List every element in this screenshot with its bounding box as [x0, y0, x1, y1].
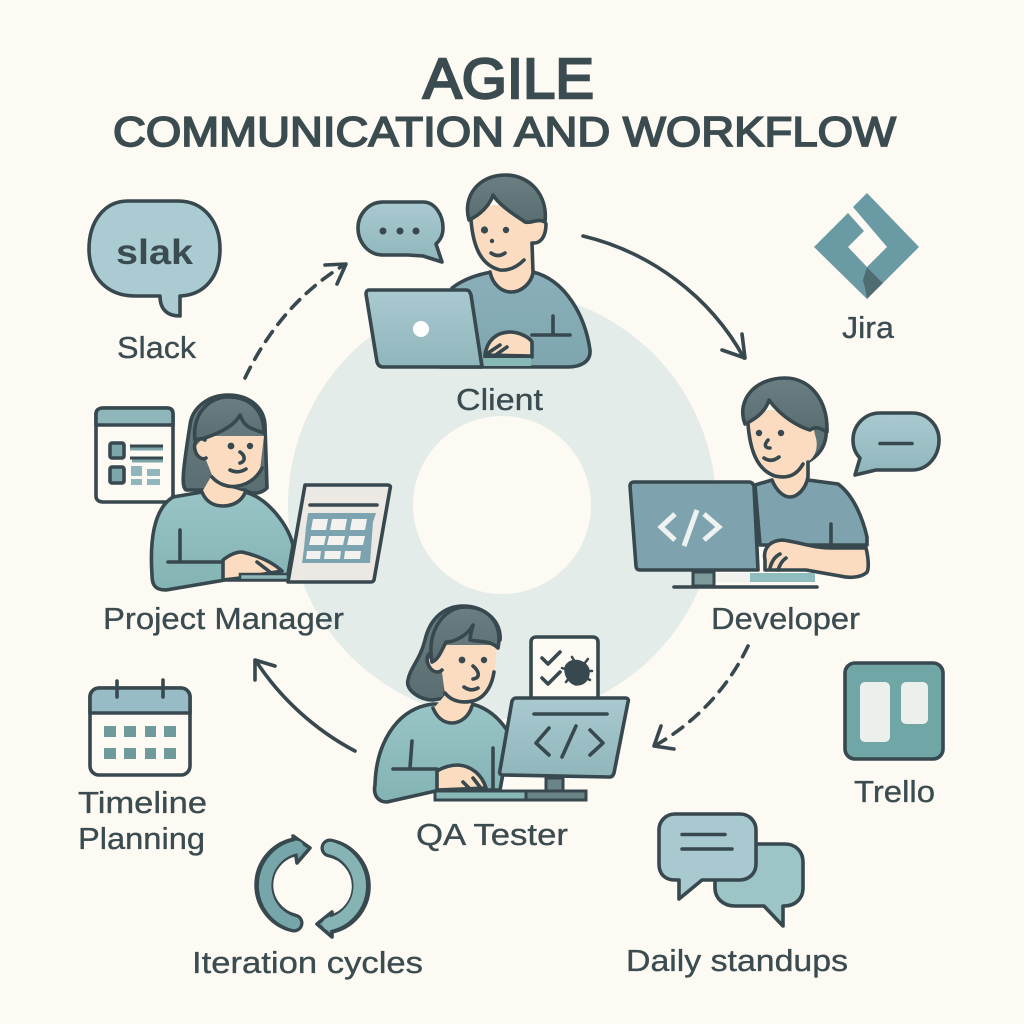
icon: slack bubble	[89, 201, 220, 316]
hair back	[800, 400, 826, 462]
laptop	[366, 290, 482, 367]
laptop with calendar	[288, 485, 390, 582]
sleeve lines and hand	[223, 552, 282, 580]
monitor	[500, 698, 628, 777]
central ring	[288, 291, 716, 719]
arrow: QA tester to project manager	[255, 660, 355, 751]
neck and face	[427, 645, 497, 723]
hand	[485, 332, 532, 356]
title	[113, 47, 896, 155]
shirt	[151, 492, 293, 590]
label: trello: Trello	[854, 774, 935, 809]
face features	[459, 657, 487, 690]
title: COMMUNICATION AND WORKFLOW	[113, 108, 896, 155]
label: slack: Slack	[117, 330, 197, 365]
hair	[408, 606, 500, 700]
shirt	[440, 272, 590, 367]
label: jira: Jira	[842, 310, 895, 345]
face features	[228, 443, 253, 472]
icon: calendar	[90, 680, 190, 775]
shirt	[375, 704, 510, 802]
arm and hand	[765, 540, 868, 577]
hair	[183, 395, 267, 493]
face features	[756, 430, 784, 460]
label: timeline planning	[78, 785, 207, 856]
label: QA tester: QA Tester	[416, 817, 568, 852]
icon: trello board	[845, 663, 943, 759]
keyboard	[714, 573, 815, 582]
icon: jira diamond	[814, 193, 919, 299]
figure: QA tester	[375, 606, 628, 802]
title: AGILE	[423, 47, 594, 111]
label: timeline planning: Planning	[78, 821, 205, 856]
label: client: Client	[456, 382, 543, 417]
desktop monitor	[630, 482, 817, 587]
speech bubble with dots	[358, 202, 443, 262]
hair	[467, 175, 545, 222]
icon: slack bubble: slak	[116, 233, 194, 272]
sleeve lines and hand	[437, 765, 486, 790]
label: iteration cycles: Iteration cycles	[192, 945, 423, 980]
board window	[96, 408, 173, 502]
label: daily standups: Daily standups	[626, 943, 848, 978]
figure: project manager	[96, 395, 390, 590]
shirt	[755, 480, 867, 545]
hair fringe	[431, 607, 499, 662]
figure: client	[358, 175, 590, 367]
icon: iteration cycles arrows	[264, 836, 361, 937]
keyboard and stand	[435, 778, 586, 800]
arrow: project manager to client (dashed)	[245, 264, 346, 378]
hair fringe	[195, 397, 264, 440]
label: developer: Developer	[711, 601, 860, 636]
figure: developer	[630, 378, 939, 587]
keyboard	[240, 574, 288, 580]
neck and face	[471, 205, 546, 292]
hair	[743, 378, 827, 432]
arrow: client to developer	[583, 236, 745, 358]
arrow: developer to QA tester (dashed)	[654, 646, 748, 749]
neck and face	[195, 436, 264, 506]
neck and face	[748, 410, 817, 497]
icon: daily standups bubbles	[659, 814, 803, 926]
checklist with bug	[531, 637, 598, 700]
label: project manager: Project Manager	[103, 601, 344, 636]
label: timeline planning: Timeline	[78, 785, 207, 820]
face features	[481, 226, 509, 256]
speech bubble with dash	[853, 413, 939, 475]
